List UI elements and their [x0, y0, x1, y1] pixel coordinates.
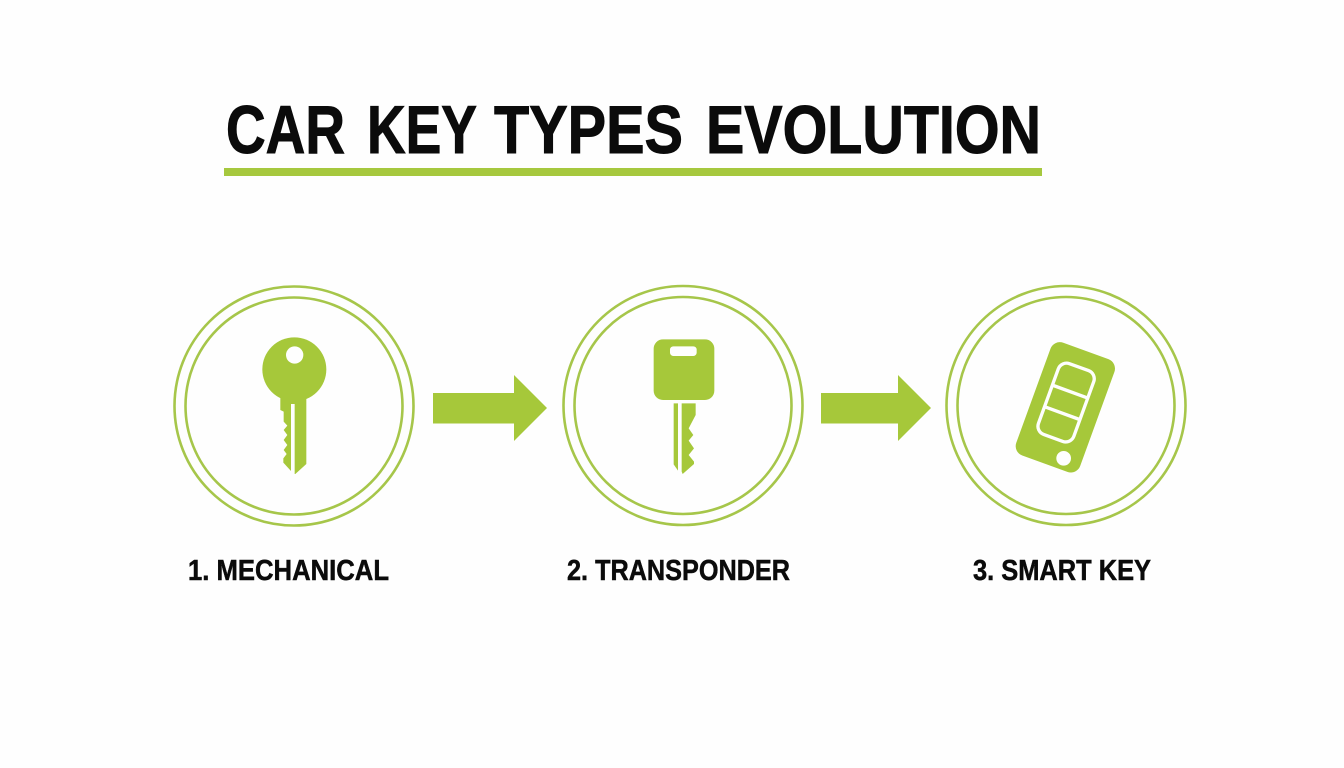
title — [226, 92, 1041, 168]
arrow 2 — [821, 375, 931, 441]
title: CAR — [226, 92, 345, 168]
title: EVOLUTION — [706, 92, 1041, 168]
label 3: 3. SMART KEY — [973, 555, 1151, 587]
label 2: 2. TRANSPONDER — [567, 555, 790, 587]
step 3: smart key — [946, 286, 1186, 587]
arrow 1 — [433, 375, 547, 441]
icon: smart key fob — [1013, 339, 1118, 475]
title: TYPES — [494, 92, 683, 168]
icon: mechanical key — [262, 337, 326, 474]
title: KEY — [367, 92, 477, 168]
double ring 2 — [564, 286, 802, 525]
double ring 3 — [946, 286, 1186, 525]
icon: transponder key — [654, 339, 714, 474]
label 1: 1. MECHANICAL — [188, 555, 389, 587]
double ring 1 — [174, 286, 414, 526]
step 2: transponder — [564, 286, 802, 587]
step 1: mechanical — [174, 286, 414, 587]
title underline — [224, 168, 1042, 176]
